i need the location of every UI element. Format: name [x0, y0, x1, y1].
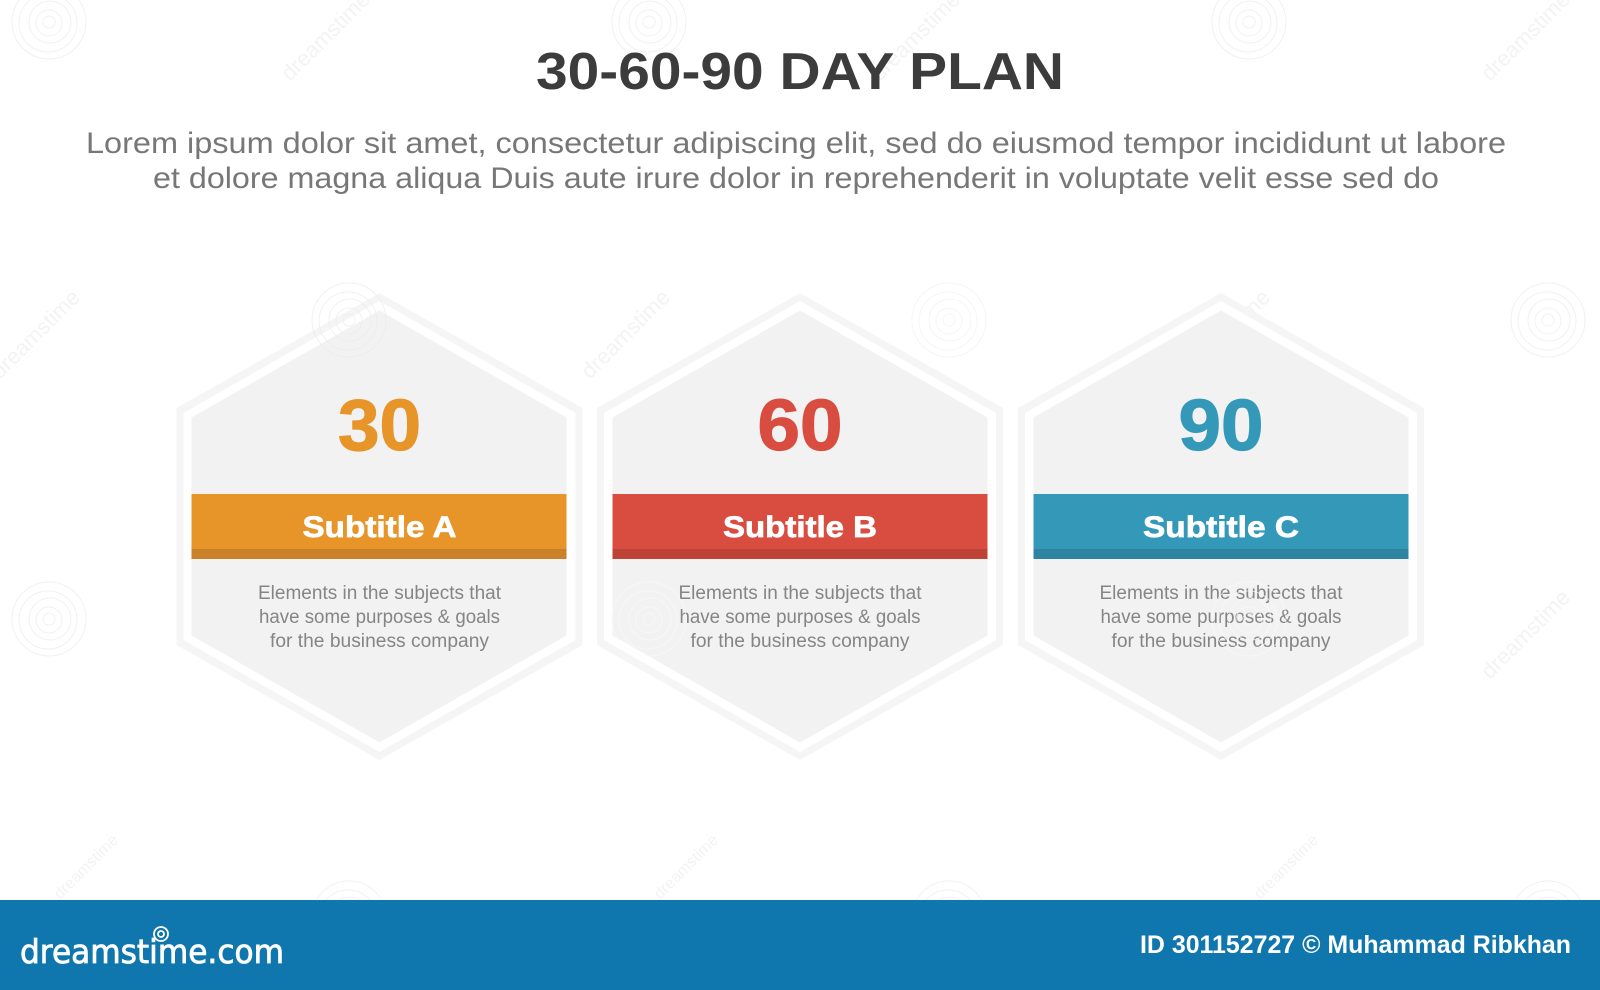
subtitle band A [192, 494, 566, 559]
description A [258, 583, 502, 652]
watermark pattern: dreamstime [651, 832, 722, 903]
number 90: 90 [1178, 386, 1264, 466]
watermark pattern: dreamstime [1251, 832, 1322, 903]
watermark spirals over panels [312, 283, 1286, 656]
subtitle band B: Subtitle B [723, 511, 877, 544]
description B: for the business company [690, 631, 910, 652]
watermark pattern: dreamstime [1476, 585, 1575, 684]
description C: have some purposes & goals [1100, 607, 1342, 628]
subtitle band B [612, 494, 988, 559]
description B: have some purposes & goals [680, 607, 920, 628]
number 30: 30 [338, 386, 421, 466]
panel: 90 days [1018, 293, 1424, 760]
description A: have some purposes & goals [259, 607, 500, 628]
description B [678, 583, 922, 652]
intro paragraph: et dolore magna aliqua Duis aute irure dolor in reprehenderit in voluptate velit esse sed do [153, 162, 1439, 195]
description C: Elements in the subjects that [1100, 583, 1343, 604]
footer bar [0, 900, 1600, 990]
panel: 60 days [597, 293, 1003, 760]
footer logo: dreamstime.com [20, 932, 284, 971]
watermark pattern: dreamstime [1176, 285, 1275, 384]
subtitle band C [1034, 494, 1408, 559]
description C [1100, 583, 1343, 652]
watermark pattern: dreamstime [576, 285, 675, 384]
subtitle band C: Subtitle C [1143, 511, 1299, 544]
intro paragraph [86, 127, 1506, 195]
watermark pattern: dreamstime [51, 832, 122, 903]
description A: for the business company [270, 631, 489, 652]
footer credit: ID 301152727 © Muhammad Ribkhan [1140, 931, 1571, 959]
panel: 30 days [176, 293, 582, 760]
subtitle band A: Subtitle A [302, 511, 456, 544]
description B: Elements in the subjects that [678, 583, 922, 604]
number 60: 60 [758, 386, 842, 466]
hexagon frame [597, 293, 1003, 760]
description C: for the business company [1112, 631, 1331, 652]
intro paragraph: Lorem ipsum dolor sit amet, consectetur adipiscing elit, sed do eiusmod tempor incididunt ut labore [86, 127, 1506, 160]
title: 30-60-90 DAY PLAN [536, 43, 1064, 101]
description A: Elements in the subjects that [258, 583, 502, 604]
hexagon frame [176, 293, 582, 760]
hexagon frame [1018, 293, 1424, 760]
